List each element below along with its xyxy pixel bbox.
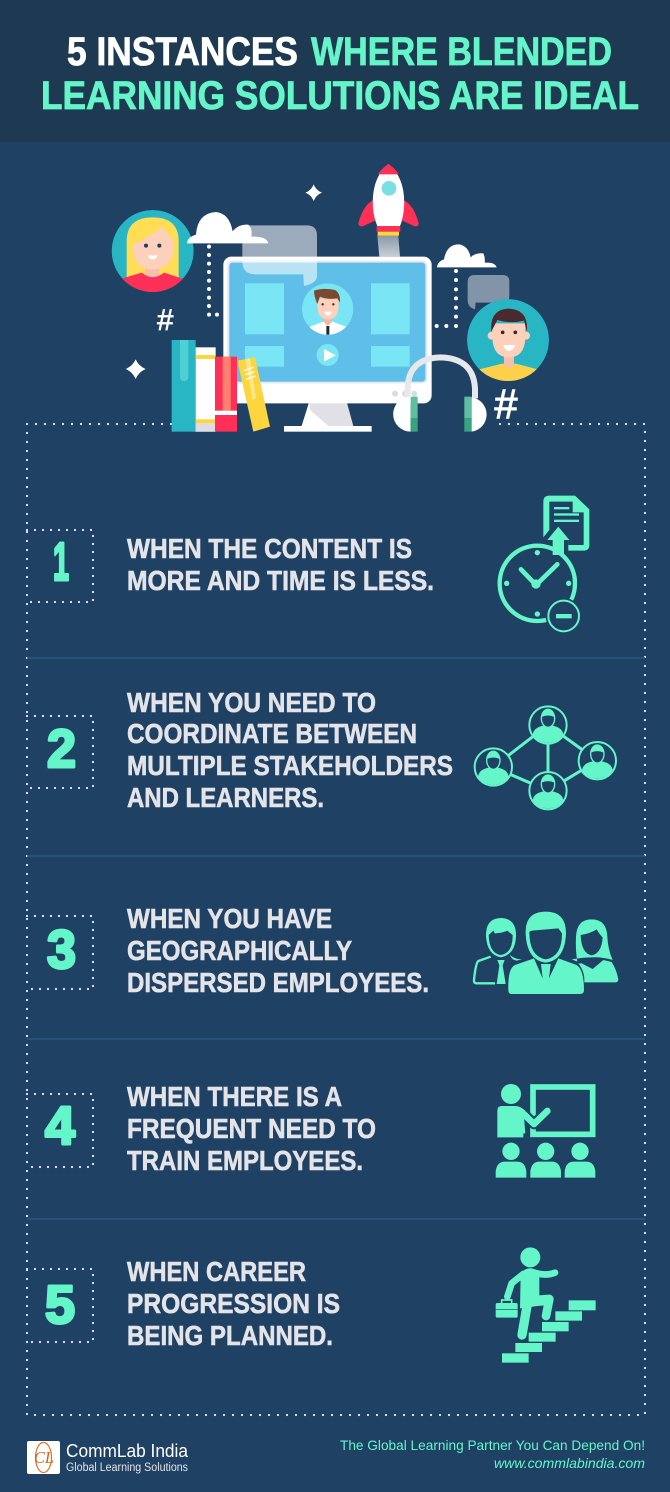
logo mark xyxy=(27,1441,60,1474)
text 1: MORE AND TIME IS LESS. xyxy=(127,565,434,596)
text 3: DISPERSED EMPLOYEES. xyxy=(127,967,429,998)
play button xyxy=(317,344,339,366)
panel: item 2 xyxy=(27,687,616,813)
number box 5: 5 xyxy=(45,1275,75,1335)
monitor xyxy=(223,257,432,432)
panel: item 5 xyxy=(27,1247,596,1363)
panel: item 3 xyxy=(27,903,618,998)
text 2: MULTIPLE STAKEHOLDERS xyxy=(127,750,453,781)
text 4: TRAIN EMPLOYEES. xyxy=(127,1145,363,1176)
cloud right xyxy=(437,244,497,267)
text 4 xyxy=(127,1081,376,1176)
title xyxy=(41,30,639,118)
speech bubble large xyxy=(242,225,317,286)
divider xyxy=(27,1038,645,1040)
number box 3 xyxy=(27,916,93,989)
divider xyxy=(27,855,645,857)
text 5: BEING PLANNED. xyxy=(127,1320,333,1351)
panel: item 1 xyxy=(27,496,589,634)
hash left: # xyxy=(157,304,174,337)
dotted outer frame xyxy=(27,424,645,1415)
number box 2 xyxy=(27,716,93,788)
text 1: WHEN THE CONTENT IS xyxy=(127,533,412,564)
footer tagline: The Global Learning Partner You Can Depend On! xyxy=(340,1437,645,1453)
avatar: woman xyxy=(112,210,194,293)
title: WHERE BLENDED xyxy=(311,30,612,74)
text 2: AND LEARNERS. xyxy=(127,782,324,813)
headphones xyxy=(392,357,487,432)
number box 4 xyxy=(27,1094,93,1167)
text 1 xyxy=(127,533,434,596)
number box 3: 3 xyxy=(47,920,76,980)
icon: employees group xyxy=(474,912,618,994)
rocket xyxy=(358,164,419,257)
footer logo xyxy=(27,1441,189,1474)
hash right: # xyxy=(494,381,517,427)
text 3: WHEN YOU HAVE xyxy=(127,903,332,934)
books xyxy=(172,340,270,432)
sparkle top xyxy=(305,184,322,201)
divider xyxy=(27,1218,645,1220)
brand tagline: Global Learning Solutions xyxy=(66,1462,188,1474)
text 5: PROGRESSION IS xyxy=(127,1288,340,1319)
avatar: man xyxy=(467,299,549,383)
number box 4: 4 xyxy=(45,1096,75,1156)
brand name: CommLab India xyxy=(66,1441,189,1461)
text 2: WHEN YOU NEED TO xyxy=(127,687,376,718)
number box 5 xyxy=(27,1269,93,1342)
icon: stakeholder network xyxy=(475,706,616,809)
text 4: FREQUENT NEED TO xyxy=(127,1113,376,1144)
presenter xyxy=(302,283,353,337)
header band xyxy=(0,0,670,142)
text 3 xyxy=(127,903,429,998)
dotted link right xyxy=(435,269,458,328)
sparkle left xyxy=(126,359,146,379)
panel: item 4 xyxy=(27,1081,595,1178)
logo mark: CL xyxy=(34,1448,54,1467)
text 3: GEOGRAPHICALLY xyxy=(127,935,352,966)
cloud left xyxy=(187,212,268,243)
text 5: WHEN CAREER xyxy=(127,1256,306,1287)
text 5 xyxy=(127,1256,340,1351)
number box 2: 2 xyxy=(47,719,76,779)
number box 1: 1 xyxy=(53,532,69,592)
footer website: www.commlabindia.com xyxy=(494,1455,645,1471)
text 2 xyxy=(127,687,453,813)
icon: climbing stairs xyxy=(496,1247,596,1363)
hero illustration xyxy=(112,164,549,432)
text 2: COORDINATE BETWEEN xyxy=(127,718,417,749)
number box 1 xyxy=(27,530,93,602)
divider xyxy=(27,657,645,659)
text 4: WHEN THERE IS A xyxy=(127,1081,342,1112)
title: 5 INSTANCES xyxy=(67,30,298,74)
icon: trainer and audience xyxy=(496,1084,595,1178)
icon: clock and document xyxy=(500,496,589,634)
dotted link left xyxy=(207,245,219,317)
speech bubble small xyxy=(468,275,509,309)
